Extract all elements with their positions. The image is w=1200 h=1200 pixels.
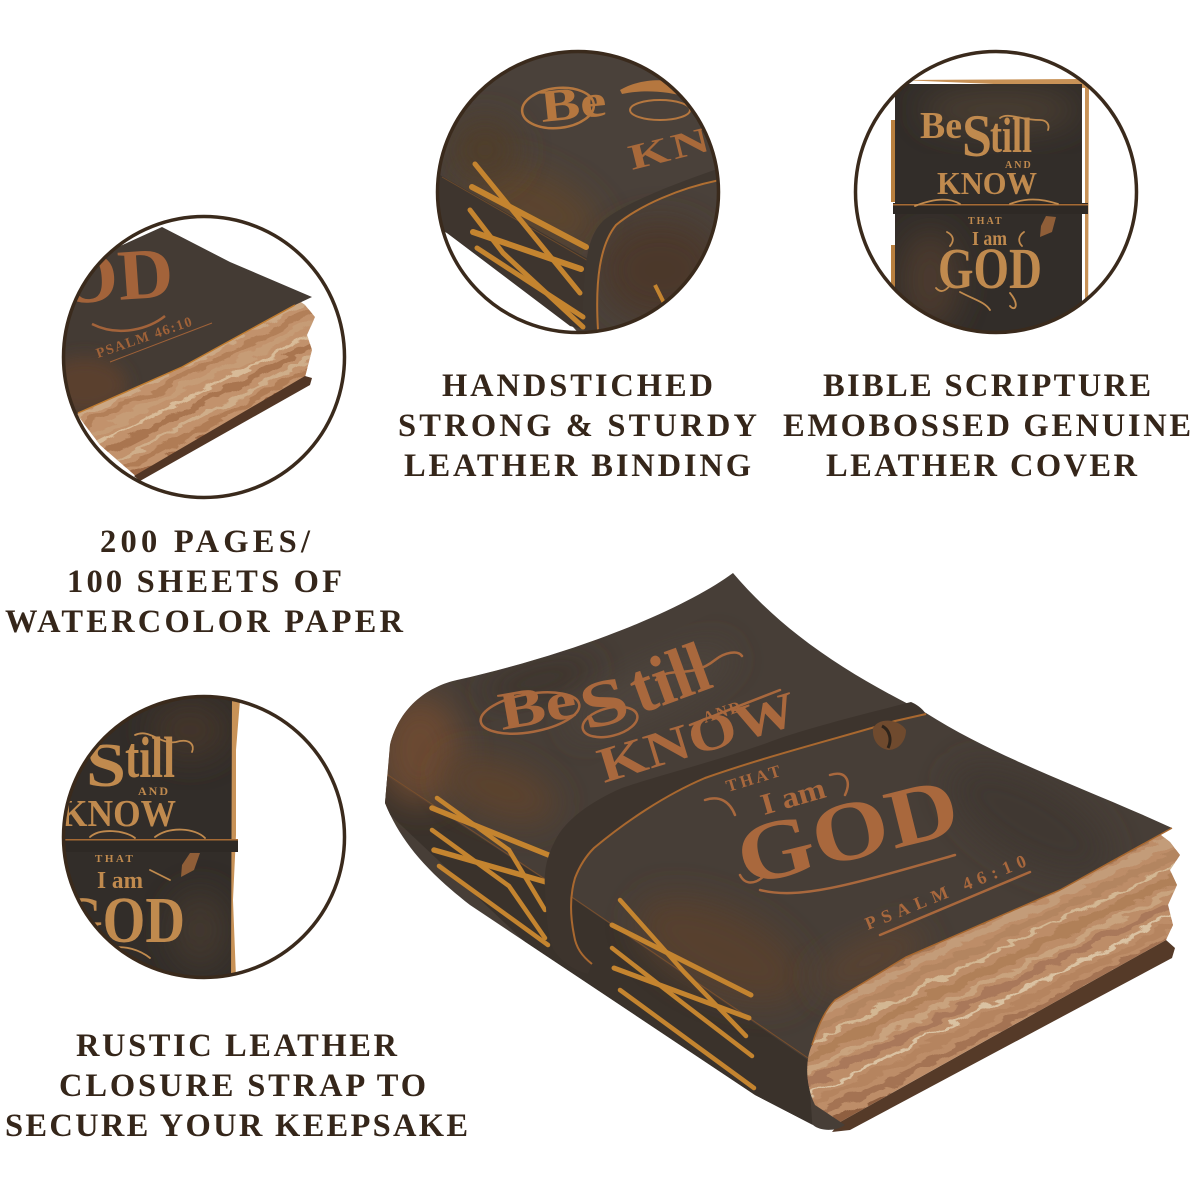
THAT: THAT bbox=[95, 853, 135, 865]
caption: cover: EMOBOSSED GENUINE bbox=[783, 408, 1191, 444]
I am: I am bbox=[972, 228, 1007, 250]
book: embossed till: till bbox=[618, 626, 721, 729]
book: closure strap bbox=[545, 702, 926, 974]
I am: I am bbox=[97, 868, 143, 894]
book: stitching lower bbox=[612, 900, 754, 1088]
book: embossed KNOW: KNOW bbox=[591, 680, 803, 794]
caption: pages: 100 SHEETS OF bbox=[67, 564, 342, 600]
circle: pages detail bbox=[43, 216, 344, 498]
caption: pages: 200 PAGES/ bbox=[100, 524, 311, 560]
flourishes bbox=[915, 116, 1058, 310]
stitching bbox=[470, 164, 586, 327]
book: embossed I am: I am bbox=[757, 772, 829, 822]
book: embossed Be: Be bbox=[494, 669, 581, 742]
book: embossed GOD: GOD bbox=[727, 760, 968, 904]
caption: cover: LEATHER COVER bbox=[826, 448, 1138, 484]
embossed GOD fragment: OD bbox=[56, 232, 176, 320]
main book photo illustration bbox=[378, 573, 1185, 1135]
book: leather shading bbox=[378, 632, 1128, 1135]
KNOW: KNOW bbox=[60, 793, 176, 835]
knot bbox=[1040, 216, 1056, 237]
GOD: GOD bbox=[60, 884, 185, 957]
AND: AND bbox=[138, 784, 170, 798]
embossed S bbox=[620, 80, 677, 94]
circle: embossed cover detail bbox=[856, 52, 1136, 336]
book: embossed AND: AND bbox=[701, 698, 745, 727]
THAT: THAT bbox=[968, 216, 1004, 227]
cover bbox=[895, 84, 1082, 336]
spine side bbox=[436, 175, 590, 330]
caption: strap: RUSTIC LEATHER bbox=[76, 1028, 398, 1064]
caption: binding: LEATHER BINDING bbox=[404, 448, 751, 484]
page edge bbox=[231, 695, 240, 978]
book: strap orange edge bbox=[571, 714, 926, 964]
circle: leather binding detail bbox=[430, 40, 730, 340]
strap bbox=[582, 168, 720, 330]
caption: strap: SECURE YOUR KEEPSAKE bbox=[5, 1108, 468, 1144]
caption: binding: HANDSTICHED bbox=[442, 368, 713, 404]
book: strap knot bbox=[873, 721, 906, 750]
embossed KN: KN bbox=[624, 118, 716, 178]
book: spine and cover bbox=[385, 573, 1172, 1130]
till: till bbox=[125, 725, 175, 790]
embossed Be: Be bbox=[538, 74, 609, 132]
GOD: GOD bbox=[938, 236, 1042, 301]
till: till bbox=[990, 107, 1032, 163]
embossed psalm: PSALM 46:10 bbox=[94, 314, 195, 362]
leather cover bbox=[439, 53, 717, 331]
cover bbox=[60, 695, 232, 980]
circle: closure strap detail bbox=[60, 695, 344, 980]
pages block bbox=[78, 302, 315, 476]
book: stitching upper bbox=[432, 798, 551, 945]
strap bbox=[231, 840, 238, 852]
AND: AND bbox=[1005, 160, 1033, 171]
book: bottom cover bbox=[832, 940, 1175, 1132]
book: page block bbox=[790, 825, 1185, 1132]
book: embossed psalm: PSALM 46:10 bbox=[862, 851, 1029, 934]
S: S bbox=[962, 103, 992, 169]
flourishes bbox=[90, 733, 205, 958]
caption: pages: WATERCOLOR PAPER bbox=[5, 604, 404, 640]
book: embossed THAT: THAT bbox=[724, 760, 786, 796]
book: embossed S: S bbox=[572, 662, 636, 745]
caption: binding: STRONG & STURDY bbox=[398, 408, 757, 444]
bottom cover edge bbox=[134, 376, 312, 481]
book: cover fore edge highlight bbox=[812, 828, 1172, 1045]
cover bbox=[65, 227, 312, 414]
page edges bbox=[913, 79, 1089, 298]
strap bbox=[893, 203, 1088, 214]
S: S bbox=[86, 732, 126, 800]
knot bbox=[181, 853, 200, 877]
KNOW: KNOW bbox=[937, 165, 1037, 201]
Be: Be bbox=[920, 105, 962, 147]
book: flourishes bbox=[477, 653, 1030, 935]
caption: cover: BIBLE SCRIPTURE bbox=[823, 368, 1151, 404]
caption: strap: CLOSURE STRAP TO bbox=[59, 1068, 426, 1104]
